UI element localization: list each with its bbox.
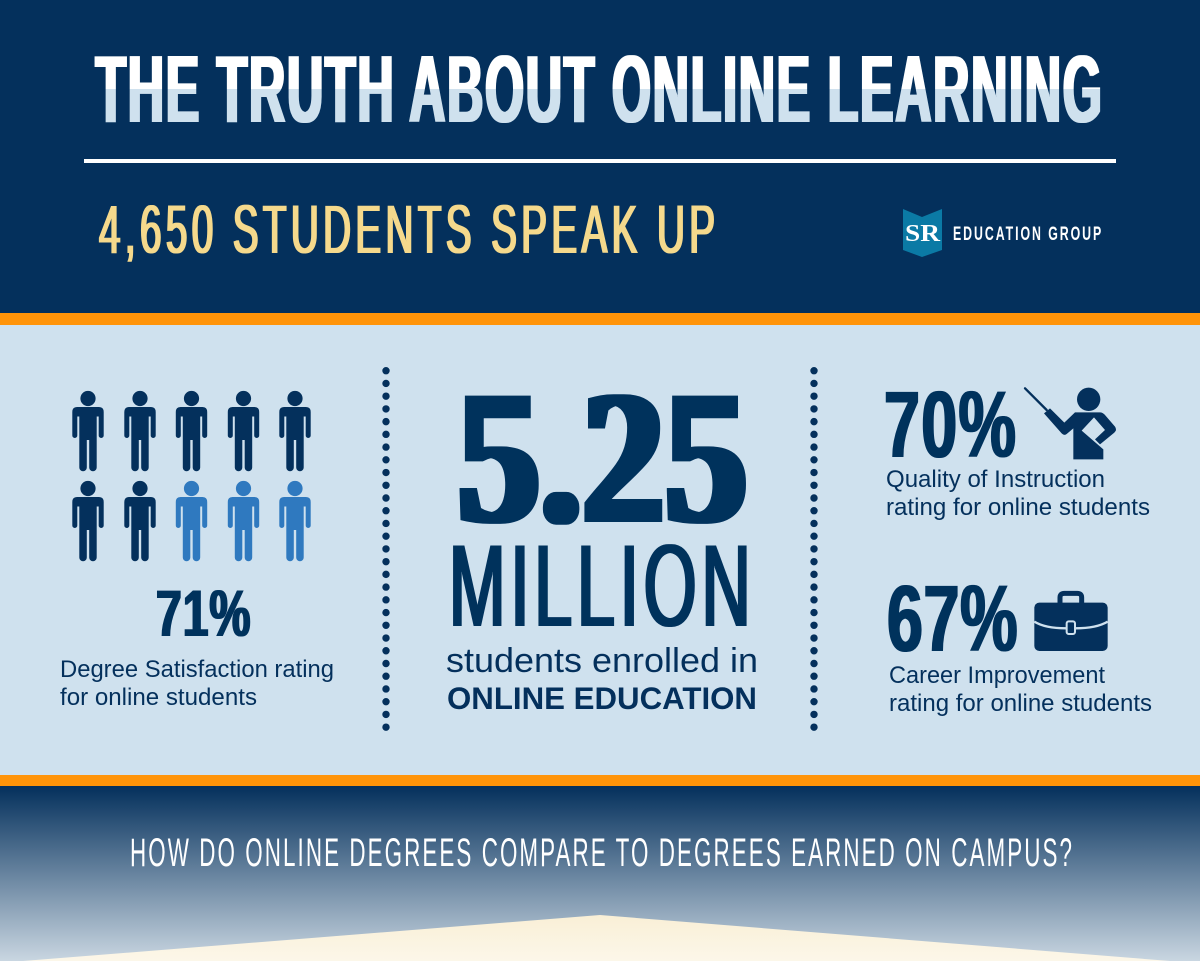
text: career improvement: [889, 662, 1152, 717]
heading: comparison question: HOW DO ONLINE DEGREES COMPARE TO DEGREES EARNED ON CAMPUS?: [130, 830, 1072, 875]
text: degree satisfaction: [60, 656, 334, 711]
text: online education: ONLINE EDUCATION: [447, 680, 757, 716]
right dotted divider: [810, 371, 818, 729]
text: career improvement: Career Improvement: [889, 662, 1105, 689]
text: career improvement: rating for online students: [889, 690, 1152, 717]
stat: 70%: 70%: [884, 372, 1016, 478]
panel: comparison teaser: [0, 786, 1200, 961]
stat: million: MILLION: [449, 521, 751, 652]
panel: career improvement: [887, 566, 1152, 717]
panel: statistics: [0, 325, 1200, 775]
text: degree satisfaction: Degree Satisfaction rating: [60, 656, 334, 683]
logo: SR Education Group: EDUCATION GROUP: [953, 223, 1101, 245]
panel: enrollment: [446, 353, 758, 716]
text: degree satisfaction: for online students: [60, 684, 257, 711]
subtitle: 4,650 STUDENTS SPEAK UP: [99, 190, 715, 268]
panel: header: [0, 0, 1200, 313]
stat: 5.25: 5.25: [458, 353, 747, 563]
panel: quality of instruction: [884, 372, 1150, 521]
icon: briefcase: [1034, 593, 1108, 651]
text: quality of instruction: rating for online students: [886, 494, 1150, 521]
text: quality of instruction: [886, 466, 1150, 521]
logo: SR Education Group: [903, 209, 1101, 257]
text: students enrolled in: students enrolled in: [446, 642, 758, 680]
top orange band: [0, 313, 1200, 325]
title rule: [84, 159, 1116, 163]
bottom orange band: [0, 775, 1200, 786]
arrow: cream chevron top: [23, 915, 1170, 961]
title: THE TRUTH ABOUT ONLINE LEARNING: [96, 37, 1102, 143]
panel: degree satisfaction: [60, 391, 334, 711]
stat: 71%: 71%: [156, 577, 250, 651]
stat: 67%: 67%: [887, 566, 1018, 672]
logo: SR Education Group: SR: [905, 221, 941, 247]
left dotted divider: [382, 371, 390, 729]
icon: ten people pictogram, 71 percent: [72, 391, 311, 561]
icon: teacher with pointer: [1025, 388, 1116, 459]
text: quality of instruction: Quality of Instruction: [886, 466, 1105, 493]
